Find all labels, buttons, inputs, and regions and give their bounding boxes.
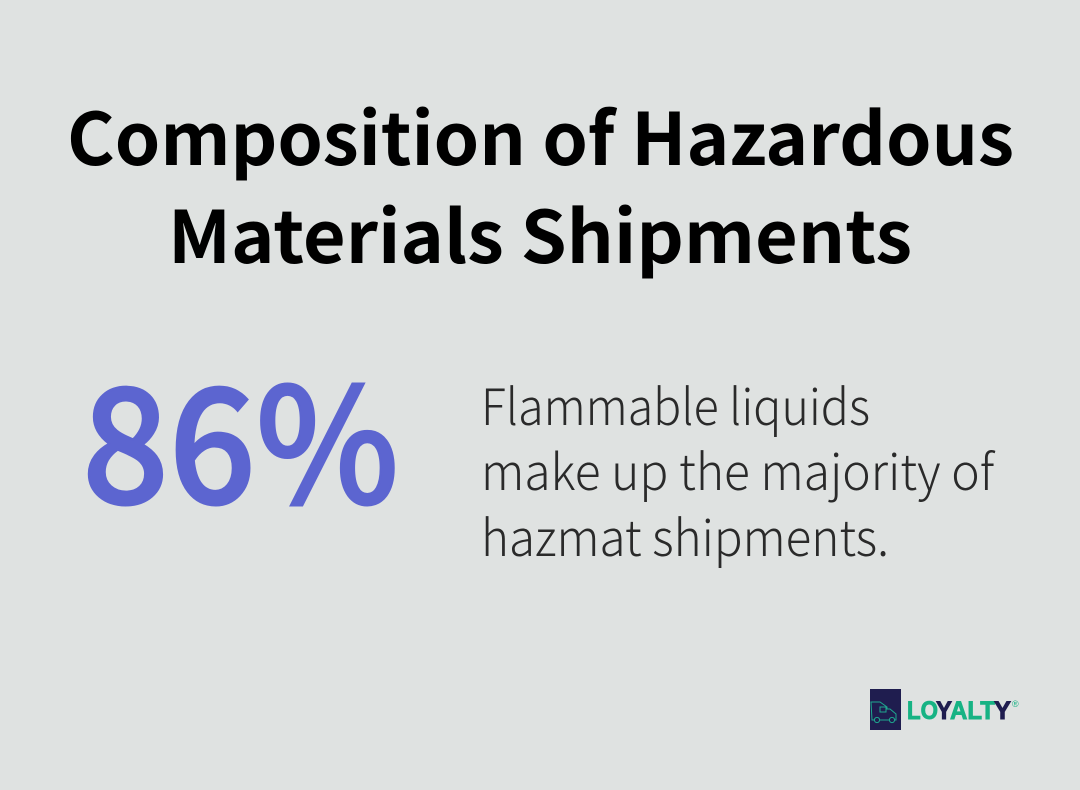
logo wordmark: Y: [994, 697, 1011, 725]
logo wordmark: ®: [1012, 699, 1019, 709]
title: Materials Shipments: [168, 179, 912, 284]
description text: Flammable liquids: [481, 368, 870, 440]
title: [67, 81, 1014, 284]
logo wordmark: ALT: [950, 697, 995, 725]
icon: truck on navy square: [870, 689, 901, 730]
title: Composition of Hazardous: [67, 81, 1014, 186]
logo wordmark: Y: [936, 697, 952, 725]
logo wordmark: [907, 697, 1019, 725]
description text: make up the majority of: [481, 433, 996, 505]
logo: Loyalty: [870, 689, 1019, 730]
logo wordmark: LO: [907, 697, 938, 725]
description text: hazmat shipments.: [481, 499, 889, 571]
description text: [481, 368, 996, 571]
big statistic: 86%: 86%: [82, 319, 399, 549]
